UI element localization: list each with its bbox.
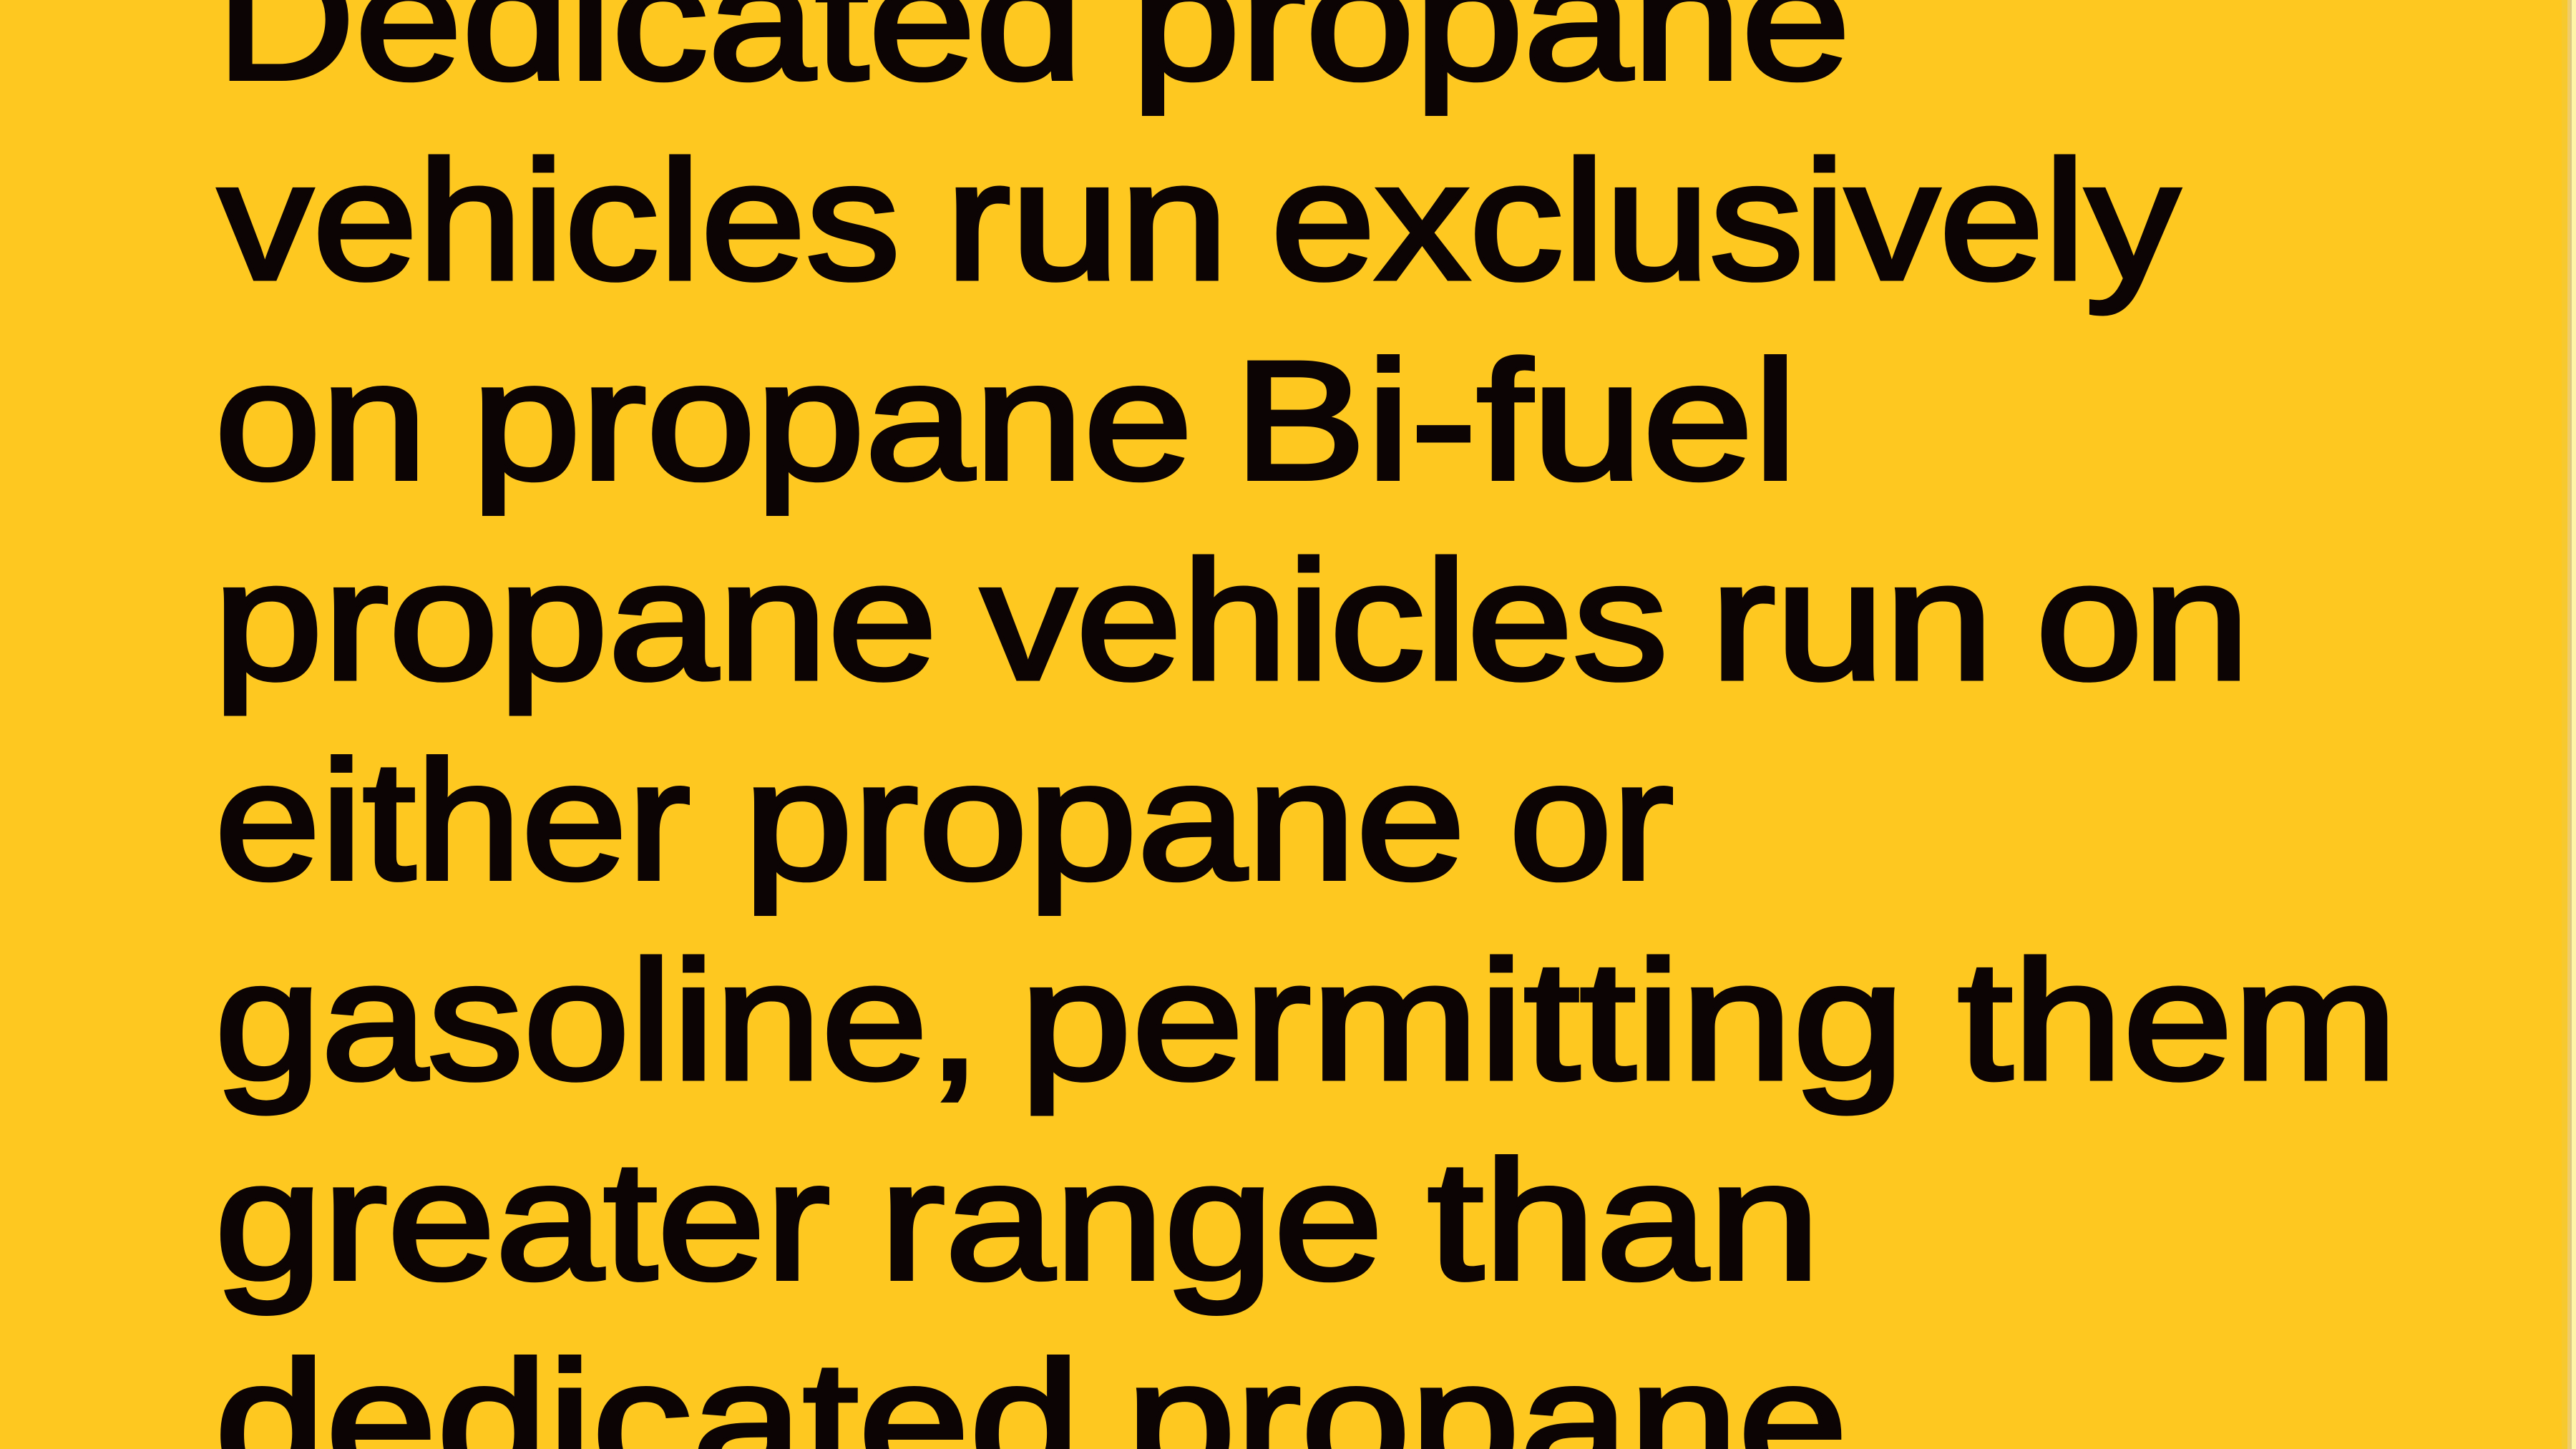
text line 5 [215,726,1674,915]
text line 4: vehicles [981,527,1668,716]
text line 7: greater [215,1126,830,1315]
text line 4: propane [213,527,937,716]
text line 3 [215,326,1797,515]
text line 3: propane [472,326,1193,515]
text line 7: than [1428,1126,1820,1315]
right edge strip [2562,0,2576,1449]
text line 5: or [1509,726,1674,915]
text line 6 [215,926,2398,1115]
text line 3: on [215,326,427,515]
text line 6: gasoline, [215,926,981,1115]
text line 5: propane [743,726,1465,915]
text line 2: exclusively [1271,126,2180,315]
text line 2: vehicles [218,126,900,315]
text line 4: on [2036,527,2250,716]
text line 2 [218,126,2180,315]
text line 6: them [1958,926,2398,1115]
text line 5: either [215,726,691,915]
text line 8 [215,1327,1848,1449]
text line 7 [215,1126,1820,1315]
text line 4 [213,527,2250,716]
text line 7: range [879,1126,1383,1315]
text line 1 [216,0,1850,115]
text line 2: run [945,126,1229,315]
text line 6: permitting [1020,926,1905,1115]
text line 4: run [1710,527,1994,716]
text line 3: Bi-fuel [1234,326,1797,515]
